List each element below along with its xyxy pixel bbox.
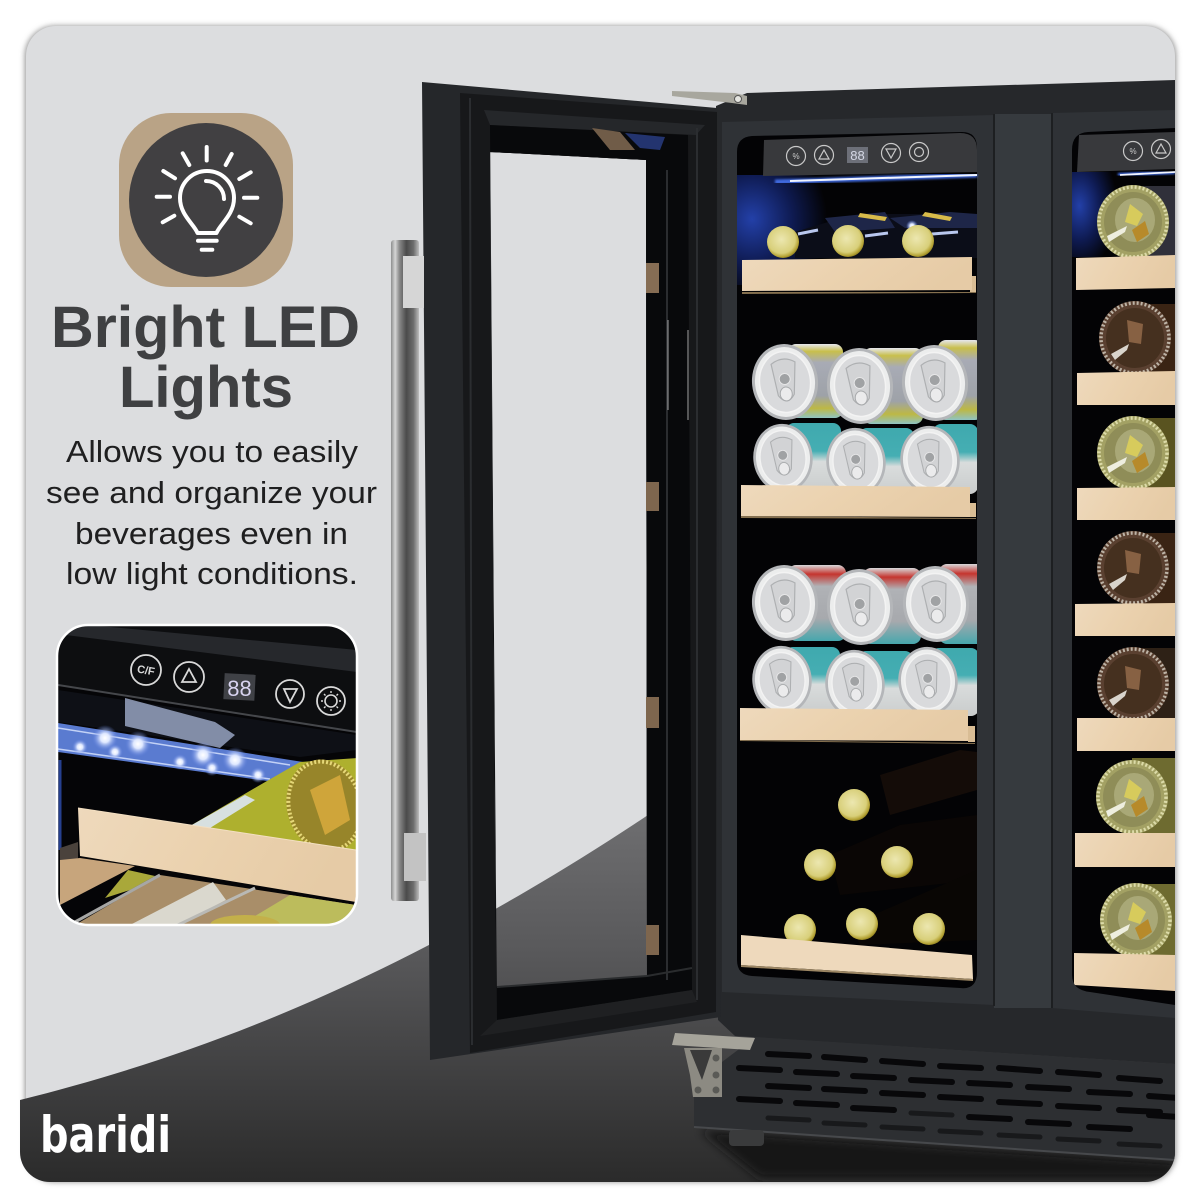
center divider [994,114,1052,1008]
top row beer bottles [767,212,977,258]
top hinge [672,91,747,105]
description text: see and organize your [46,475,377,510]
shelf 1 [742,257,976,294]
open glass door [422,82,721,1060]
base vent grille [694,1037,1179,1160]
panel: LED close-up inset photo [57,625,374,935]
right control panel [1077,132,1175,175]
description text [46,434,377,591]
shelf 4 [741,935,973,981]
panel: LED close-up inset photo: 88 [227,676,252,701]
door handle [391,240,426,901]
shelf 3 [740,708,975,744]
left control panel: % [792,152,800,161]
left control panel [763,133,977,176]
icon: light bulb badge [119,113,293,287]
wine cooler cabinet [694,80,1186,1178]
heading: Bright LED [51,295,360,360]
left compartment interior [737,132,984,988]
right control panel: % [1129,147,1137,156]
dark floor wedge [20,816,1175,1182]
left control panel: 88 [850,148,865,163]
panel: LED close-up inset photo: C/F [136,664,156,678]
can row 4 [752,646,977,716]
description text: Allows you to easily [66,434,359,469]
description text: beverages even in [75,516,348,551]
right compartment interior [1072,128,1186,1005]
right column bottles [1096,185,1172,957]
can row 1 [748,340,983,427]
description text: low light conditions. [66,556,358,591]
right column shelves [1074,255,1175,991]
logo: baridi: baridi [40,1106,171,1164]
bottom bottles [784,750,977,946]
adjustable foot [729,1130,764,1146]
bottom hinge [672,1033,755,1097]
shelf 2 [741,485,976,519]
LED light strip [775,175,977,182]
heading [51,295,360,420]
can row 3 [752,564,977,645]
can row 2 [753,423,977,494]
heading: Lights [119,355,293,420]
